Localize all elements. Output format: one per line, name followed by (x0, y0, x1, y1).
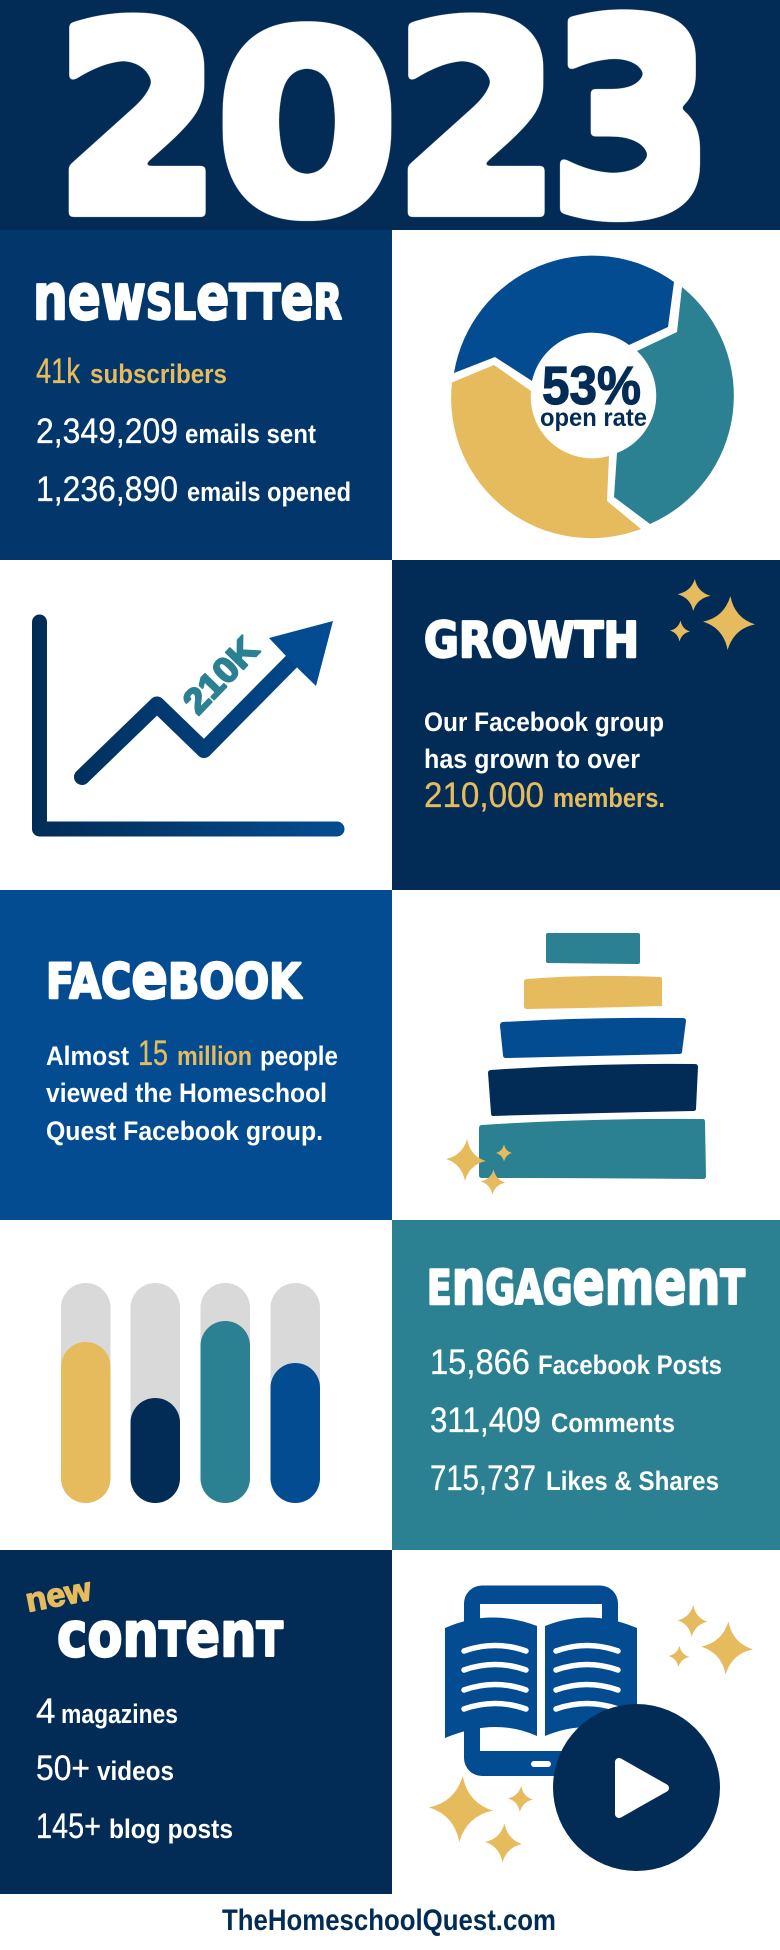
stat: comments (430, 1401, 675, 1440)
donut segment: blue (454, 256, 674, 381)
panel: engagement (392, 1220, 780, 1550)
donut label: open rate: open rate (540, 404, 647, 432)
progress bar: yellow (61, 1342, 110, 1503)
text: 210,000 members: members. (553, 783, 665, 813)
stack bar 4 (488, 1064, 698, 1116)
text: almost 15 million people: Almost (46, 1041, 129, 1071)
label: 210K: 210K (176, 630, 266, 722)
icon: sparkles (445, 1138, 512, 1195)
stack bar 2 (524, 976, 662, 1009)
stat: emails opened: 1,236,890 (36, 470, 178, 509)
text: has grown to over: has grown to over (424, 744, 640, 774)
chart axes (40, 622, 337, 829)
progress bar: teal (200, 1321, 250, 1503)
stat: emails opened (36, 470, 351, 509)
stack bar 1 (546, 933, 640, 964)
stat: blog posts: 145+ (36, 1807, 101, 1846)
stat: subscribers: subscribers (90, 359, 227, 389)
progress bar: navy (130, 1398, 180, 1503)
footer: website: TheHomeschoolQuest.com (222, 1904, 556, 1937)
progress bar: blue (270, 1363, 320, 1503)
donut segment: teal (614, 287, 734, 524)
stat: blog posts (36, 1807, 233, 1846)
donut segment: yellow (451, 365, 641, 538)
arrow head (269, 621, 333, 686)
heading: growth: GROWTH (424, 612, 639, 669)
panel: newsletter (0, 230, 392, 560)
panel: facebook (0, 890, 392, 1220)
stack bar 5 (479, 1119, 706, 1179)
text: almost 15 million people: million (177, 1041, 252, 1071)
donut label: 53%: 53% (542, 356, 641, 416)
stat: likes and shares: 715,737 (430, 1459, 536, 1498)
panel: growth chart (40, 621, 337, 829)
stat: facebook posts: Facebook Posts (538, 1350, 722, 1380)
stat: subscribers: 41k (36, 352, 80, 391)
heading: engagement: EnGAGemenT (427, 1246, 745, 1319)
stat: likes and shares: Likes & Shares (546, 1466, 719, 1496)
stat: facebook posts: 15,866 (430, 1343, 530, 1382)
heading: facebook: FACeBOOK (46, 939, 303, 1013)
stat: emails sent (36, 412, 316, 451)
stat: emails opened: emails opened (187, 477, 351, 507)
panel: growth (392, 560, 780, 890)
progress bar tracks (61, 1283, 320, 1503)
stack bar 3 (500, 1018, 686, 1058)
label: new: new (22, 1570, 94, 1619)
heading: content: conTenT (57, 1598, 283, 1671)
text: quest facebook group: Quest Facebook group. (46, 1116, 323, 1146)
stat: magazines: 4 (36, 1692, 55, 1731)
stat: emails sent: emails sent (185, 419, 316, 449)
icon: open book (445, 1617, 637, 1738)
text: almost 15 million people: people (260, 1041, 338, 1071)
heading: newsletter: newSLeTTeR (33, 260, 342, 334)
text: our facebook group: Our Facebook group (424, 707, 664, 737)
stat: likes and shares (430, 1459, 719, 1498)
stat: emails sent: 2,349,209 (36, 412, 178, 451)
panel: tablet and book illustration (427, 1586, 754, 1871)
text: almost 15 million people (46, 1034, 338, 1073)
icon: play button (553, 1704, 720, 1871)
icon: upper sparkles (668, 1604, 754, 1676)
text: 210,000 members (424, 776, 665, 815)
stat: subscribers (36, 352, 227, 391)
panel: open rate donut chart (451, 256, 734, 538)
stat: videos: 50+ (36, 1749, 90, 1788)
title: 2023 (52, 0, 717, 272)
stat: comments: 311,409 (430, 1401, 541, 1440)
text: viewed the homeschool: viewed the Homeschool (46, 1078, 327, 1108)
panel: stacked bars illustration (445, 933, 706, 1195)
stat: facebook posts (430, 1343, 722, 1382)
stat: videos: videos (97, 1756, 174, 1786)
stat: comments: Comments (551, 1408, 675, 1438)
icon: sparkles (669, 578, 756, 651)
icon: lower sparkles (427, 1774, 534, 1863)
text: 210,000 members: 210,000 (424, 776, 544, 815)
stat: magazines: magazines (61, 1699, 178, 1729)
panel: progress bars chart (61, 1283, 320, 1503)
stat: magazines (36, 1692, 178, 1731)
text: almost 15 million people: 15 (138, 1034, 168, 1073)
stat: blog posts: blog posts (109, 1814, 233, 1844)
header panel (0, 0, 780, 272)
icon: tablet (464, 1586, 618, 1776)
panel: new content (0, 1550, 392, 1894)
growth line (82, 660, 293, 777)
stat: videos (36, 1749, 174, 1788)
